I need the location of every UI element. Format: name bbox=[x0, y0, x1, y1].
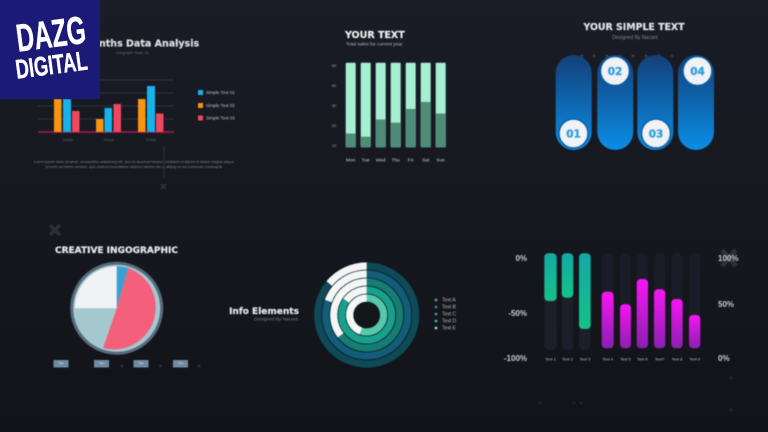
stacked bar chart: weekdays: 20 bbox=[332, 124, 336, 128]
right axis: percent: 50% bbox=[718, 300, 734, 309]
bar labels: Text 8 bbox=[672, 356, 683, 362]
bar chart: percent magenta bbox=[602, 253, 700, 348]
heading: info elements: Designed By Nacant bbox=[254, 316, 299, 322]
text block: description bbox=[34, 160, 234, 169]
numbered pills: 01 bbox=[566, 128, 581, 140]
legend: radial chart: Text B bbox=[442, 304, 457, 310]
left axis: percent: 0% bbox=[515, 254, 527, 263]
numbered pills: 02 bbox=[608, 66, 622, 78]
legend: radial chart: Text D bbox=[442, 318, 457, 324]
heading: your text: Total sales for current year bbox=[346, 42, 403, 48]
stacked bar chart: weekdays: Sun bbox=[436, 158, 445, 164]
decorative x mark bbox=[50, 225, 60, 235]
stacked bar chart: weekdays: Sat bbox=[422, 158, 430, 164]
left axis: percent bbox=[504, 254, 527, 363]
numbered pills bbox=[556, 55, 714, 150]
legend: radial chart bbox=[435, 298, 457, 332]
bar chart: monthly data: Simple bbox=[63, 138, 73, 142]
stacked bar chart: weekdays: 40 bbox=[332, 84, 336, 88]
bar labels bbox=[545, 356, 701, 362]
bar labels: Text 1 bbox=[545, 356, 557, 362]
text block: description: Lorem ipsum dolor sit amet, consectetur adipiscing elit, sed do eiusmod tempor incididunt ut labore et dolore magna aliqua. bbox=[34, 160, 234, 164]
heading: months data analysis: nths Data Analysis bbox=[99, 38, 199, 50]
numbered pills: 03 bbox=[649, 128, 663, 140]
right axis: percent bbox=[718, 254, 738, 363]
heading: your text: YOUR TEXT bbox=[344, 30, 405, 41]
right axis: percent: 0% bbox=[718, 354, 730, 363]
stacked bar chart: weekdays: Thu bbox=[392, 158, 400, 164]
radial chart bbox=[318, 266, 416, 364]
logo: DAZG Digital bbox=[0, 0, 100, 99]
bar chart: monthly data: Simple bbox=[104, 138, 114, 142]
left axis: percent: -50% bbox=[508, 309, 527, 318]
pie labels: Text bbox=[99, 361, 104, 365]
heading: creative ingographic: CREATIVE INGOGRAPHIC bbox=[55, 246, 178, 256]
legend: bar chart: Simple Text 02 bbox=[206, 103, 235, 108]
bar labels: Text 6 bbox=[637, 356, 648, 362]
decorative cross marker bbox=[161, 146, 166, 189]
legend: radial chart: Text A bbox=[442, 298, 456, 304]
bar labels: Text 3 bbox=[580, 356, 591, 362]
legend: radial chart: Text C bbox=[442, 312, 457, 318]
stacked bar chart: weekdays: 10 bbox=[332, 144, 336, 148]
pie chart bbox=[72, 263, 162, 353]
bar chart: monthly data bbox=[38, 80, 174, 142]
stacked bar chart: weekdays: Wed bbox=[376, 158, 386, 164]
text block: description: Ut enim ad minim veniam, quis nostrud exercitation ullamco laboris nisi ut aliquip ex ea commodo consequat. bbox=[45, 165, 223, 169]
bar labels: Text7 bbox=[655, 356, 665, 362]
heading: months data analysis bbox=[99, 38, 199, 55]
decorative x mark behind axis bbox=[722, 250, 736, 266]
heading: your text bbox=[344, 30, 405, 48]
pie labels: Text bbox=[178, 361, 183, 365]
heading: info elements: Info Elements bbox=[229, 307, 299, 317]
stacked bar chart: weekdays: 30 bbox=[332, 104, 336, 108]
pie labels: Text bbox=[58, 361, 64, 365]
pie labels bbox=[54, 360, 200, 368]
logo: DAZG Digital: DAZG bbox=[14, 9, 88, 61]
decorative faint marks bbox=[538, 376, 733, 412]
bar chart: negative percent teal bbox=[544, 253, 591, 350]
heading: your simple text: Designed By Nacant bbox=[612, 35, 658, 41]
pie labels: Text bbox=[138, 361, 144, 365]
numbered pills: 04 bbox=[690, 66, 705, 78]
legend: bar chart bbox=[198, 90, 235, 120]
right axis: percent: 100% bbox=[718, 254, 738, 263]
legend: radial chart: Text E bbox=[442, 326, 457, 332]
heading: your simple text bbox=[582, 22, 685, 41]
stacked bar chart: weekdays: Fri bbox=[408, 158, 413, 164]
heading: months data analysis: Infograph Tools 15 bbox=[116, 50, 150, 55]
heading: info elements bbox=[229, 307, 299, 322]
stacked bar chart: weekdays: Tue bbox=[362, 158, 370, 164]
legend: bar chart: Simple Text 01 bbox=[206, 90, 235, 95]
stacked bar chart: weekdays: Mon bbox=[346, 158, 356, 164]
stacked bar chart: weekdays: 50 bbox=[332, 64, 336, 68]
bar chart: monthly data: Simple bbox=[146, 138, 156, 142]
logo: DAZG Digital: DIGITAL bbox=[14, 46, 89, 85]
decorative dots bbox=[580, 54, 674, 58]
bar labels: Text 9 bbox=[689, 356, 701, 362]
heading: your simple text: YOUR SIMPLE TEXT bbox=[582, 22, 685, 33]
left axis: percent: -100% bbox=[504, 354, 527, 363]
legend: bar chart: Simple Text 03 bbox=[206, 116, 235, 120]
bar labels: Text 4 bbox=[602, 356, 614, 362]
stacked bar chart: weekdays bbox=[332, 63, 446, 164]
bar labels: Text 5 bbox=[620, 356, 632, 362]
bar labels: Text 2 bbox=[562, 356, 574, 362]
